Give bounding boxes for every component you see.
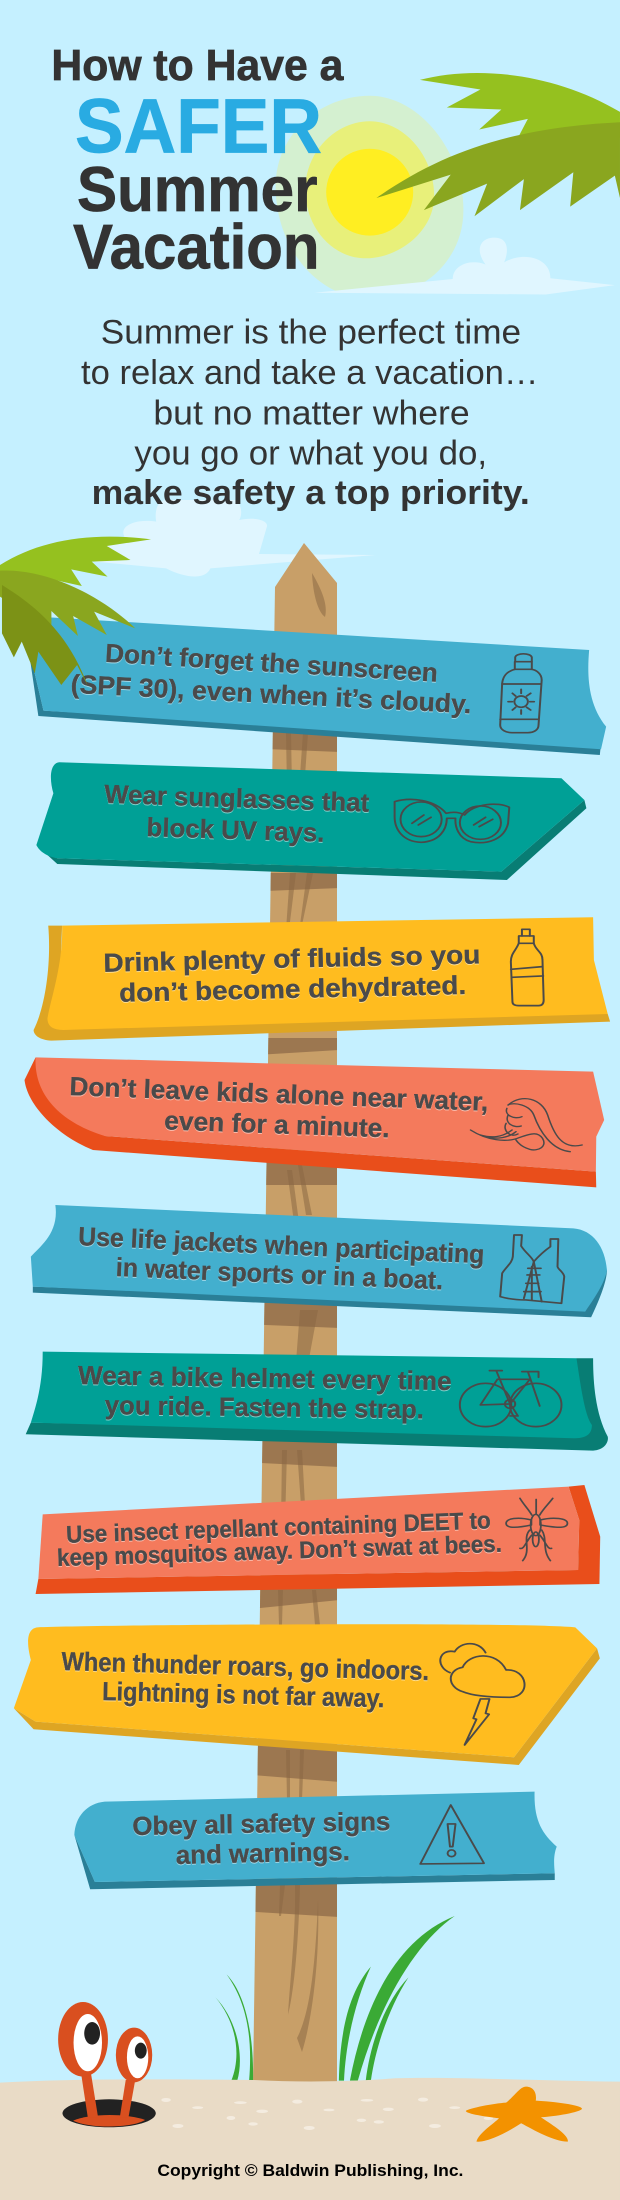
panel: sign 5 life jackets [31, 1205, 607, 1317]
icon: mosquito [506, 1498, 567, 1561]
panel: sign 6 bike helmet [26, 1352, 608, 1451]
sign text [57, 1507, 502, 1572]
sign text: you ride. Fasten the strap. [105, 1390, 424, 1424]
sign text: (SPF 30), even when it’s cloudy. [70, 669, 472, 719]
sign text [70, 638, 472, 719]
sign text [104, 779, 370, 848]
icon: warning triangle [420, 1805, 484, 1864]
panel: sign 3 fluids [34, 917, 610, 1041]
sign board [26, 1352, 608, 1451]
sign post [253, 543, 337, 2082]
sign text [78, 1221, 485, 1295]
icon: water bottle [511, 929, 544, 1006]
sign text: Obey all safety signs [132, 1806, 391, 1841]
icon: life jacket [500, 1235, 564, 1303]
crab peeking from hole [58, 2002, 156, 2127]
sign text: Drink plenty of fluids so you [103, 939, 481, 978]
icon: storm cloud [440, 1644, 525, 1745]
sign text [69, 1071, 489, 1143]
icon: sunglasses [395, 799, 509, 843]
sign text: Use life jackets when participating [78, 1221, 485, 1269]
sign board [31, 1205, 607, 1317]
palm frond: left [0, 537, 151, 686]
panel: sign 1 sunscreen [28, 617, 606, 755]
sign text: Don’t leave kids alone near water, [69, 1071, 489, 1117]
palm frond: top right [376, 73, 620, 216]
sign board [36, 1485, 600, 1594]
title: Vacation [73, 213, 320, 283]
panel: sign 4 water [25, 1057, 604, 1187]
sign text: keep mosquitos away. Don’t swat at bees. [57, 1531, 502, 1572]
sign text: Don’t forget the sunscreen [104, 638, 439, 688]
sand [0, 2078, 620, 2200]
sign text [103, 939, 481, 1008]
intro text: make safety a top priority. [92, 474, 530, 512]
sign text: block UV rays. [146, 812, 325, 848]
grass [215, 1916, 455, 2081]
sign text [61, 1646, 430, 1713]
icon: wave [471, 1099, 582, 1152]
copyright: Copyright © Baldwin Publishing, Inc. [157, 2161, 463, 2180]
title: Summer [77, 155, 318, 225]
icon: sunscreen bottle [500, 654, 542, 733]
sign board [14, 1624, 600, 1765]
cloud: top right [314, 238, 615, 294]
sign text: don’t become dehydrated. [119, 970, 466, 1008]
icon: bicycle [460, 1371, 561, 1427]
panel: sign 7 insect repellant [36, 1485, 600, 1594]
sign text: and warnings. [175, 1836, 350, 1870]
sign text: in water sports or in a boat. [115, 1252, 444, 1295]
sign text [132, 1806, 391, 1870]
sign text: even for a minute. [164, 1105, 390, 1143]
sign board [25, 1057, 604, 1187]
title [51, 42, 344, 283]
starfish [466, 2087, 582, 2142]
title: SAFER [75, 84, 322, 170]
intro text [81, 314, 538, 512]
sign text [78, 1360, 452, 1424]
sign text: Lightning is not far away. [102, 1676, 385, 1713]
icon: sun [276, 96, 463, 293]
intro text: to relax and take a vacation… [81, 354, 538, 392]
sign board [36, 762, 586, 880]
sign board [74, 1792, 557, 1889]
sign board [28, 617, 606, 755]
sign board [34, 917, 610, 1041]
cloud: behind post [51, 500, 376, 576]
panel: sign 8 thunder [14, 1624, 600, 1765]
panel: sign 9 safety signs [74, 1792, 557, 1889]
intro text: Summer is the perfect time [101, 314, 521, 352]
intro text: you go or what you do, [134, 434, 487, 472]
title: How to Have a [51, 42, 344, 90]
sign text: Use insect repellant containing DEET to [66, 1507, 491, 1549]
sign text: Wear sunglasses that [104, 779, 370, 818]
intro text: but no matter where [153, 394, 470, 432]
sign text: Wear a bike helmet every time [78, 1360, 452, 1396]
panel: sign 2 sunglasses [36, 762, 586, 880]
sign text: When thunder roars, go indoors. [61, 1646, 430, 1686]
